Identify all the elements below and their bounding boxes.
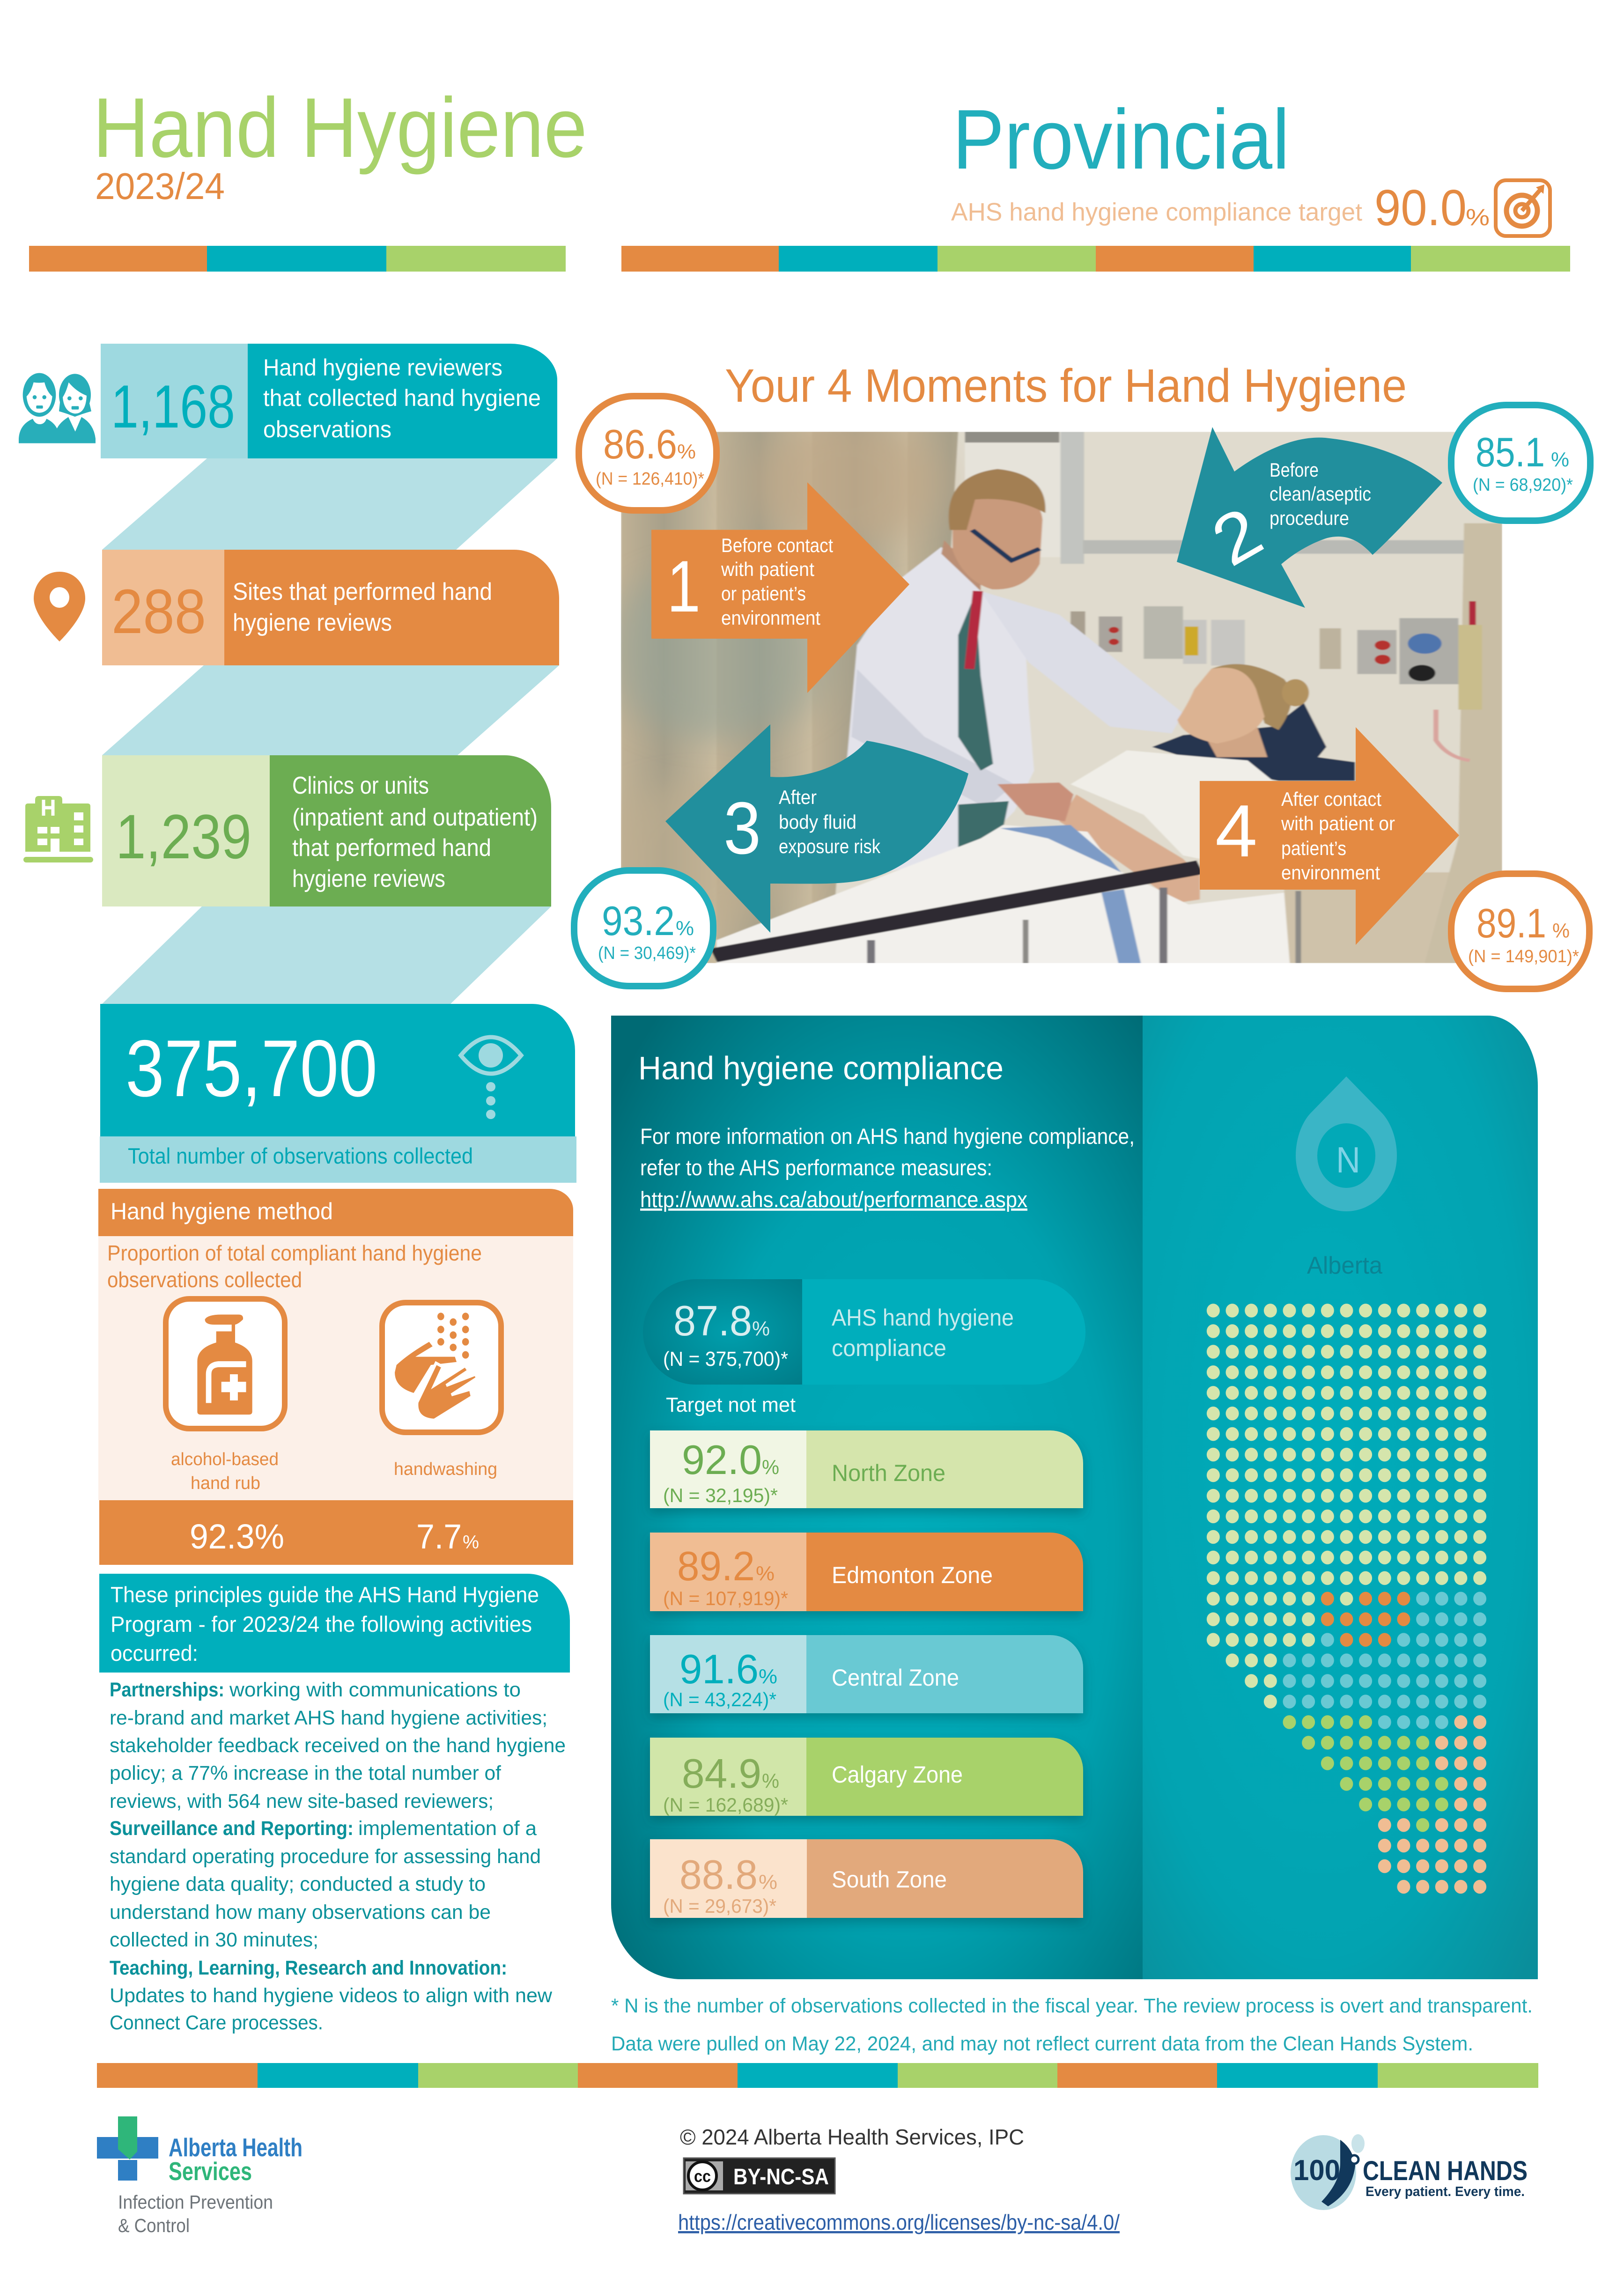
panel: principles header: These principles guide the AHS Hand Hygiene	[111, 1582, 539, 1607]
text: moment 2: procedure	[1270, 507, 1349, 529]
callout: moment 3 compliance	[574, 870, 713, 986]
logo: Alberta Health Services	[97, 2116, 303, 2236]
icon: location pin	[34, 572, 85, 641]
zone row: Central: Central Zone	[832, 1665, 959, 1691]
icon: alcohol-based hand rub	[166, 1299, 285, 1429]
stat row: sites	[102, 550, 559, 665]
title: Hand Hygiene: Hand Hygiene	[93, 81, 587, 175]
panel: principles header: Program - for 2023/24 the following activities	[111, 1612, 532, 1636]
overall compliance pill: %	[752, 1317, 770, 1340]
values bar: %	[463, 1532, 479, 1553]
licence link: https://creativecommons.org/licenses/by-nc-sa/4.0/	[678, 2210, 1120, 2234]
text: proportion description: Proportion of total compliant hand hygiene	[107, 1241, 482, 1265]
footnote	[611, 1995, 1533, 2055]
label: target not met: Target not met	[666, 1393, 796, 1416]
compliance target value: 90.0	[1374, 179, 1467, 236]
zone row: Calgary: (N = 162,689)*	[663, 1794, 788, 1816]
text: principles body: implementation of a	[358, 1817, 537, 1840]
overall compliance pill	[643, 1279, 1085, 1385]
zone row: Calgary: 84.9	[682, 1750, 761, 1797]
values bar: 92.3%	[190, 1517, 284, 1556]
logo: Alberta Health Services: & Control	[118, 2215, 190, 2236]
icon: eye	[461, 1037, 521, 1119]
colour bar: footer	[97, 2063, 1538, 2088]
callout: moment 4 compliance: 89.1	[1476, 900, 1546, 946]
overall compliance pill: 87.8	[673, 1297, 752, 1345]
arrow: moment 2: 2	[1199, 492, 1275, 581]
zone row: Edmonton: 89.2	[677, 1543, 755, 1589]
arrow: moment 4	[1200, 727, 1459, 945]
text: moment 1: with patient	[721, 558, 814, 580]
heading: hand hygiene compliance: Hand hygiene compliance	[638, 1050, 1004, 1086]
licence badge: cc	[694, 2167, 711, 2186]
arrow: moment 2	[1177, 427, 1442, 608]
callout: moment 3 compliance: (N = 30,469)*	[598, 943, 696, 963]
stat row: clinics or units	[102, 755, 551, 906]
zone row: North	[650, 1430, 1083, 1508]
text: moment 2: Before	[1270, 459, 1319, 481]
icon: N drop: N	[1336, 1139, 1360, 1180]
zone row: North: (N = 32,195)*	[663, 1484, 778, 1506]
text: principles body: collected in 30 minutes;	[110, 1929, 318, 1951]
logo: 100% Clean Hands: 100	[1293, 2154, 1340, 2187]
zone row: Central: 91.6	[679, 1646, 759, 1692]
callout: moment 2 compliance: %	[1551, 448, 1569, 471]
arrow: moment 1	[651, 482, 909, 693]
text: clinics description	[292, 772, 538, 892]
logo: 100% Clean Hands	[1291, 2134, 1528, 2210]
text: moment 2	[1270, 459, 1371, 529]
number: 375,700: 375,700	[125, 1024, 377, 1113]
text: principles body: stakeholder feedback received on the hand hygiene	[110, 1734, 566, 1757]
icon: N drop	[1296, 1076, 1397, 1211]
zone row: South: %	[759, 1871, 777, 1894]
panel: hand hygiene compliance	[611, 1016, 1143, 1979]
callout: moment 2 compliance: (N = 68,920)*	[1473, 475, 1573, 495]
overall compliance pill: (N = 375,700)*	[663, 1348, 788, 1371]
text: sites description	[233, 578, 492, 636]
text: moment 4: with patient or	[1281, 812, 1395, 834]
text: principles body: hygiene data quality; conducted a study to	[110, 1873, 486, 1895]
number: 288: 288	[111, 577, 206, 647]
text: principles body: Partnerships:	[110, 1679, 224, 1701]
panel: total observations	[100, 1004, 576, 1183]
text: principles body	[110, 1679, 566, 2034]
text: principles body: reviews, with 564 new site-based reviewers;	[110, 1790, 494, 1813]
arrow: moment 3: 3	[723, 787, 761, 870]
text: moment 3: After	[779, 786, 817, 808]
arrow: moment 4: 4	[1215, 790, 1257, 872]
logo: 100% Clean Hands: CLEAN HANDS	[1363, 2156, 1528, 2186]
text: moment 1: environment	[721, 607, 820, 629]
label: alcohol-based hand rub: alcohol-based	[171, 1450, 279, 1469]
text: moment 2: clean/aseptic	[1270, 483, 1371, 505]
text: clinics description: Clinics or units	[292, 772, 429, 799]
text: more information	[640, 1124, 1135, 1212]
zone row: Calgary: Calgary Zone	[832, 1761, 963, 1788]
colour bar: right header	[621, 246, 1570, 272]
zone row: South: (N = 29,673)*	[663, 1895, 776, 1917]
text: moment 4: patient’s	[1281, 837, 1346, 859]
callout: moment 4 compliance: (N = 149,901)*	[1468, 947, 1579, 966]
text: more information: http://www.ahs.ca/about/performance.aspx	[640, 1187, 1027, 1212]
licence badge	[684, 2158, 835, 2194]
text: moment 4	[1281, 788, 1395, 884]
label: total observations: Total number of observations collected	[128, 1143, 473, 1168]
number: 1,239: 1,239	[116, 802, 251, 872]
callout: moment 1 compliance: 86.6	[603, 421, 677, 467]
text: principles body: re-brand and market AHS hand hygiene activities;	[110, 1707, 547, 1729]
zone row: Edmonton: %	[756, 1562, 775, 1585]
icon: target	[1496, 180, 1550, 236]
text: clinics description: hygiene reviews	[292, 865, 445, 892]
text: principles body: policy; a 77% increase in the total number of	[110, 1762, 502, 1784]
zone row: Central: %	[759, 1665, 777, 1688]
colour bar: left header	[29, 246, 566, 272]
text: clinics description: (inpatient and outpatient)	[292, 804, 538, 831]
panel: principles header	[99, 1574, 570, 1673]
heading: Your 4 Moments for Hand Hygiene: Your 4 Moments for Hand Hygiene	[725, 360, 1407, 412]
text: reviewers description: that collected hand hygiene	[263, 385, 541, 411]
zone row: North: 92.0	[682, 1437, 762, 1483]
zone row: South: 88.8	[679, 1851, 758, 1898]
zone row: Calgary: %	[762, 1769, 779, 1792]
logo: Alberta Health Services: Infection Prevention	[118, 2191, 273, 2213]
text: principles body: Updates to hand hygiene videos to align with new	[110, 1984, 553, 2007]
licence badge: BY-NC-SA	[733, 2165, 829, 2189]
text: principles body: standard operating procedure for assessing hand	[110, 1845, 541, 1868]
overall compliance pill: AHS hand hygiene	[832, 1304, 1014, 1331]
zone row: Central	[650, 1635, 1083, 1713]
logo: Alberta Health Services: Alberta Health	[169, 2133, 303, 2162]
icon: reviewers	[19, 373, 96, 443]
text: more information: refer to the AHS performance measures:	[640, 1155, 992, 1180]
text: principles body: understand how many observations can be	[110, 1901, 491, 1924]
ribbon connectors between statistic rows	[102, 458, 559, 1004]
label: alcohol-based hand rub	[171, 1450, 279, 1493]
text: moment 1	[721, 534, 833, 629]
text: principles body: Teaching, Learning, Research and Innovation:	[110, 1957, 507, 1979]
text: moment 1: or patient’s	[721, 582, 806, 604]
text: moment 1: Before contact	[721, 534, 833, 556]
overall compliance pill: compliance	[832, 1335, 946, 1361]
text: more information: For more information on AHS hand hygiene compliance,	[640, 1124, 1135, 1149]
callout: moment 1 compliance	[579, 396, 716, 510]
text: moment 4: environment	[1281, 862, 1380, 884]
callout: moment 4 compliance: %	[1552, 919, 1570, 942]
text: clinics description: that performed hand	[292, 834, 491, 862]
zone row: Central: (N = 43,224)*	[663, 1688, 776, 1710]
callout: moment 1 compliance: (N = 126,410)*	[596, 469, 704, 489]
callout: moment 4 compliance	[1451, 874, 1589, 989]
stat row: reviewers	[101, 344, 557, 458]
text: principles body: working with communications to	[229, 1679, 521, 1701]
copyright line: © 2024 Alberta Health Services, IPC	[680, 2125, 1024, 2149]
values bar	[99, 1500, 573, 1565]
text: moment 3	[779, 786, 881, 857]
heading: hand hygiene method: Hand hygiene method	[111, 1198, 333, 1224]
logo: Alberta Health Services: Services	[169, 2157, 252, 2186]
zone row: North: North Zone	[832, 1460, 945, 1486]
text: moment 3: exposure risk	[779, 835, 881, 857]
label: alcohol-based hand rub: hand rub	[191, 1474, 260, 1493]
icon: hospital	[23, 796, 93, 862]
panel: principles header: occurred:	[111, 1641, 198, 1666]
text: moment 4: After contact	[1281, 788, 1381, 810]
icon: handwashing	[382, 1303, 501, 1432]
zone row: South: South Zone	[832, 1866, 947, 1893]
number: 1,168: 1,168	[111, 372, 235, 441]
text: principles body: Surveillance and Reporting:	[110, 1817, 354, 1840]
text: principles body: Connect Care processes.	[110, 2012, 323, 2034]
text: sites description: Sites that performed hand	[233, 578, 492, 605]
subtitle: fiscal year: 2023/24	[95, 165, 225, 207]
zone row: Calgary	[650, 1738, 1083, 1816]
text: moment 3: body fluid	[779, 811, 856, 833]
heading: Provincial: Provincial	[952, 92, 1290, 187]
zone row: Edmonton: Edmonton Zone	[832, 1562, 993, 1588]
footnote: Data were pulled on May 22, 2024, and may not reflect current data from the Clean Hands System.	[611, 2033, 1473, 2055]
panel: hand hygiene method	[98, 1189, 573, 1565]
compliance target value: %	[1466, 204, 1490, 230]
compliance target label: AHS hand hygiene compliance target	[951, 198, 1362, 226]
zone row: Edmonton: (N = 107,919)*	[663, 1587, 788, 1609]
text: proportion description: observations collected	[107, 1268, 302, 1292]
arrow: moment 1: 1	[667, 546, 701, 627]
text: reviewers description	[263, 354, 541, 442]
text: reviewers description: observations	[263, 416, 391, 442]
photo: clinician with patient in bed	[598, 421, 1502, 963]
logo: 100% Clean Hands: Every patient. Every time.	[1366, 2184, 1525, 2199]
arrow: moment 3	[665, 724, 968, 933]
text: sites description: hygiene reviews	[233, 609, 392, 636]
zone row: North: %	[762, 1456, 779, 1479]
text: reviewers description: Hand hygiene reviewers	[263, 354, 502, 381]
dot map of Alberta by zone	[1203, 1300, 1489, 1897]
callout: moment 1 compliance: %	[677, 440, 696, 463]
callout: moment 2 compliance	[1451, 405, 1590, 521]
text: proportion description	[107, 1241, 482, 1292]
callout: moment 3 compliance: 93.2	[602, 898, 675, 944]
footnote: * N is the number of observations collected in the fiscal year. The review process is overt and transparent.	[611, 1995, 1533, 2017]
callout: moment 3 compliance: %	[676, 917, 694, 940]
callout: moment 2 compliance: 85.1	[1476, 429, 1545, 475]
panel: Alberta map	[1143, 1016, 1538, 1979]
values bar: 7.7	[416, 1517, 462, 1556]
zone row: Edmonton	[650, 1533, 1083, 1611]
label: handwashing: handwashing	[394, 1459, 497, 1479]
label: Alberta: Alberta	[1307, 1252, 1382, 1279]
zone row: South	[650, 1839, 1083, 1918]
